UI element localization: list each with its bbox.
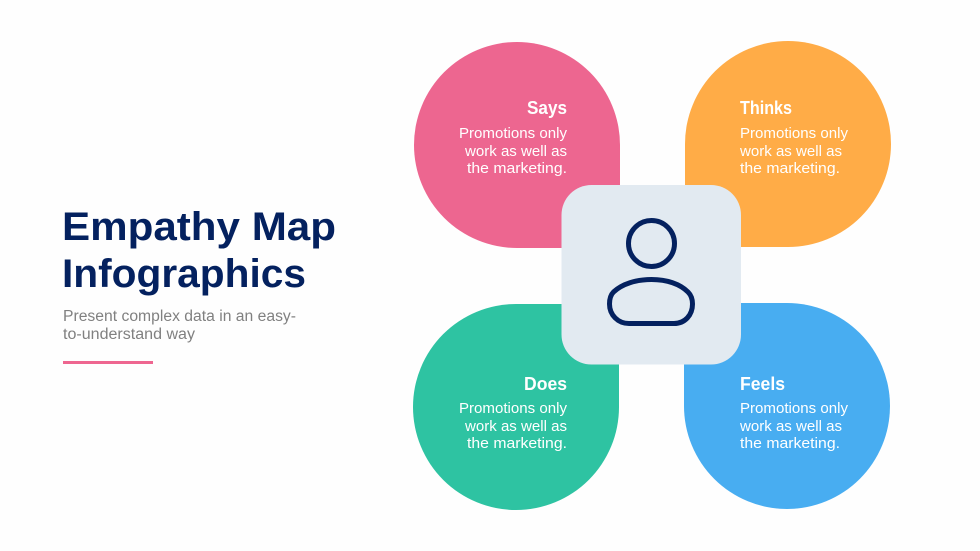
thinks body text: the marketing.: [740, 160, 840, 177]
thinks body text: work as well as: [739, 143, 842, 160]
panel: says: [414, 42, 620, 248]
title: [62, 205, 336, 296]
does body text: the marketing.: [467, 435, 567, 452]
does heading: Does: [524, 374, 567, 394]
says body text: [459, 125, 567, 177]
panel: thinks: [685, 41, 891, 247]
subtitle: Present complex data in an easy-: [63, 308, 296, 325]
title: Infographics: [62, 252, 306, 296]
thinks heading: Thinks: [740, 98, 792, 118]
says body text: Promotions only: [459, 125, 567, 142]
panel: feels: [684, 303, 890, 509]
says body text: work as well as: [464, 143, 567, 160]
thinks body text: [739, 125, 848, 177]
icon: person: [610, 220, 692, 324]
center panel: [562, 185, 741, 364]
thinks body text: Promotions only: [740, 125, 848, 142]
subtitle: to-understand way: [63, 326, 195, 343]
says heading: Says: [527, 98, 567, 118]
does body text: Promotions only: [459, 400, 567, 417]
feels body text: Promotions only: [740, 400, 848, 417]
panel: does: [413, 304, 619, 510]
subtitle: [63, 308, 296, 343]
feels body text: work as well as: [739, 418, 842, 435]
accent underline: [63, 361, 153, 364]
feels body text: [739, 400, 848, 452]
does body text: [459, 400, 567, 452]
says body text: the marketing.: [467, 160, 567, 177]
feels body text: the marketing.: [740, 435, 840, 452]
title: Empathy Map: [62, 205, 336, 249]
feels heading: Feels: [740, 374, 785, 394]
does body text: work as well as: [464, 418, 567, 435]
